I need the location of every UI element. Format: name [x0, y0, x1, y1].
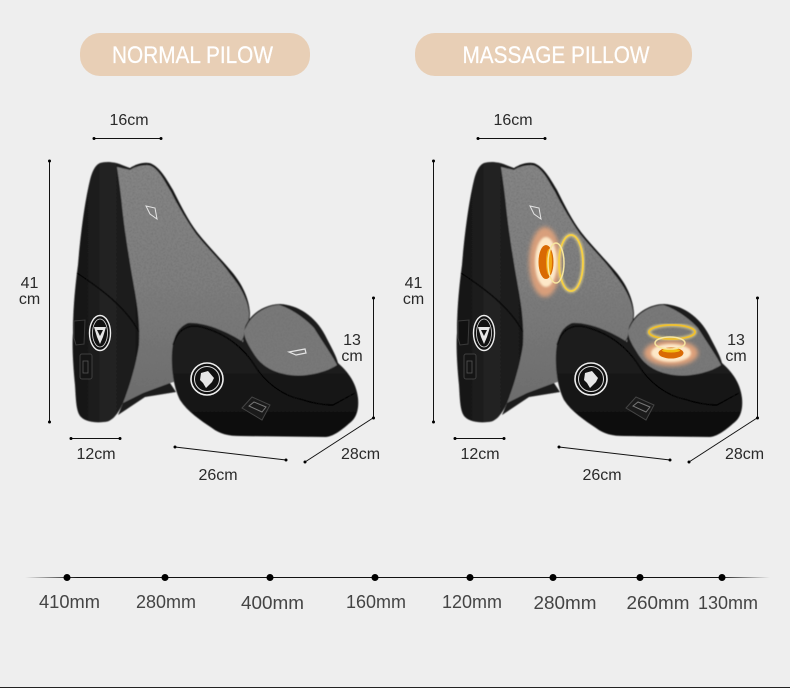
- height 41cm: [19, 160, 51, 424]
- product photo: massage pillows: [457, 162, 742, 437]
- massage effect: back pillow: [529, 227, 583, 297]
- heading pill: normal pillow: [80, 33, 310, 76]
- depth 12cm: 12cm: [76, 446, 116, 463]
- depth 12cm: 12cm: [460, 446, 500, 463]
- depth 28cm: [688, 418, 764, 464]
- heading pill: massage pillow: [415, 33, 692, 76]
- height 41cm: cm: [403, 291, 424, 308]
- timeline scale: 400mm: [241, 593, 304, 613]
- height 13cm: 13: [727, 332, 745, 349]
- width 16cm: 16cm: [493, 112, 533, 129]
- timeline scale: 130mm: [698, 593, 758, 613]
- bottom edge line: [0, 687, 790, 688]
- length 26cm: 26cm: [582, 467, 622, 484]
- height 13cm: 13: [343, 332, 361, 349]
- depth 28cm: 28cm: [341, 446, 380, 463]
- height 41cm: cm: [19, 291, 40, 308]
- heading pill: massage pillow: MASSAGE PILLOW: [462, 42, 650, 69]
- massage effect: seat pillow: [644, 325, 698, 366]
- timeline scale: 120mm: [442, 592, 502, 612]
- depth 28cm: [304, 418, 380, 464]
- heading pill: normal pillow: NORMAL PILOW: [112, 42, 273, 69]
- dimensions: massage pillow: [403, 112, 764, 484]
- height 41cm: 41: [21, 275, 38, 292]
- width 16cm: [476, 112, 546, 140]
- width 16cm: [92, 112, 162, 140]
- product photo: normal pillows: [73, 162, 358, 437]
- height 13cm: [725, 296, 759, 420]
- timeline scale: [25, 574, 770, 613]
- timeline scale: 280mm: [136, 592, 196, 612]
- height 13cm: cm: [725, 348, 747, 365]
- height 13cm: cm: [341, 348, 363, 365]
- timeline scale: 410mm: [39, 592, 100, 612]
- width 16cm: 16cm: [109, 112, 149, 129]
- timeline scale: 160mm: [346, 592, 406, 612]
- depth 12cm: [454, 437, 506, 463]
- timeline scale: 260mm: [626, 593, 690, 613]
- length 26cm: [558, 446, 672, 484]
- depth 28cm: 28cm: [725, 446, 764, 463]
- height 41cm: 41: [405, 275, 422, 292]
- length 26cm: 26cm: [198, 467, 238, 484]
- depth 12cm: [70, 437, 122, 463]
- dimensions: normal pillow: [19, 112, 380, 484]
- height 13cm: [341, 296, 375, 420]
- timeline scale: 280mm: [534, 593, 596, 613]
- length 26cm: [174, 446, 288, 484]
- height 41cm: [403, 160, 435, 424]
